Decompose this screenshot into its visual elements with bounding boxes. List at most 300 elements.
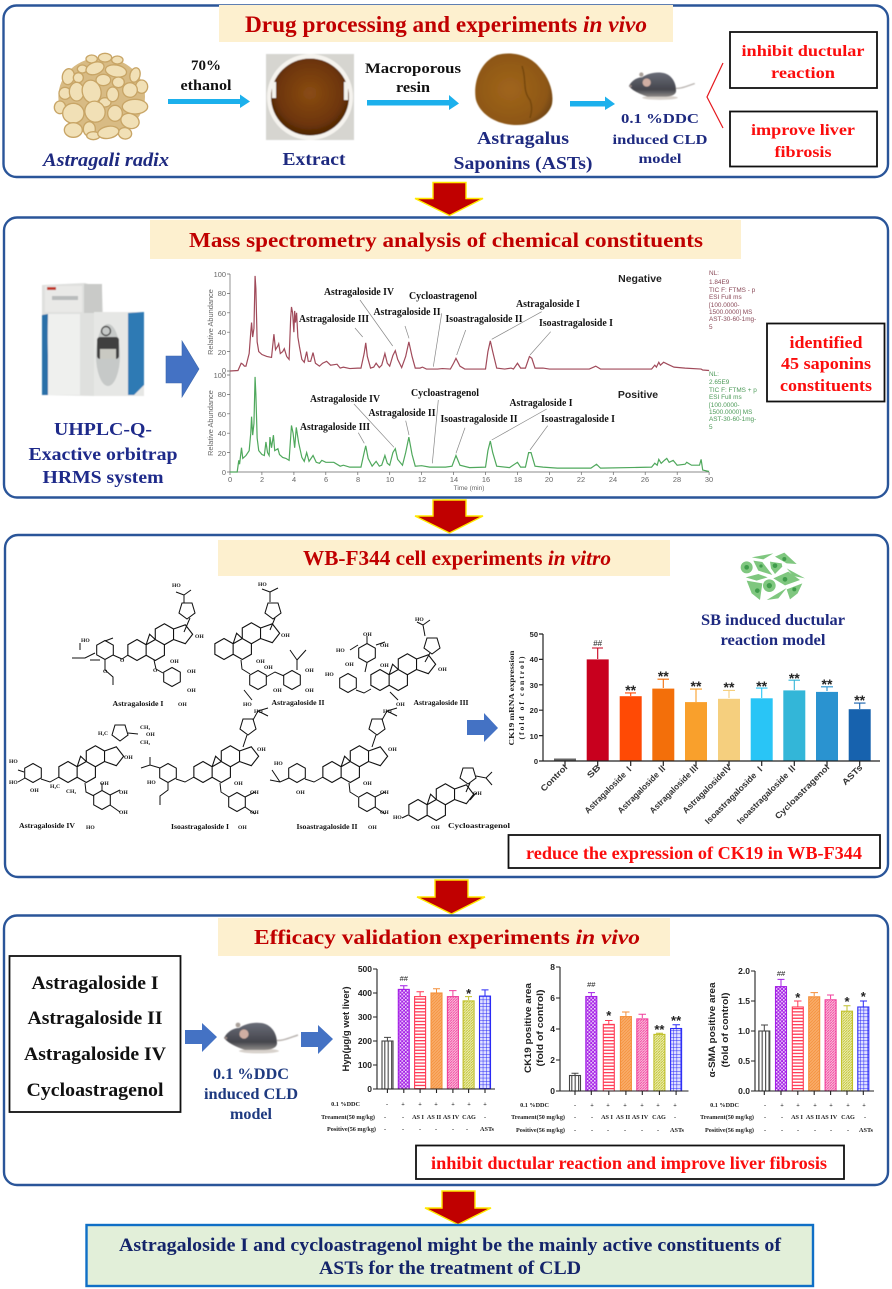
molecule: Astragaloside IV: OH — [124, 755, 133, 761]
peak labels: negative: Isoastragaloside I — [539, 318, 613, 329]
molecule: Isoastragaloside II: OH — [380, 810, 389, 816]
treatment table: + — [590, 1102, 594, 1109]
panel: drug processing — [4, 5, 888, 177]
significance marks: ** — [691, 678, 702, 694]
molecule: Astragaloside IV: HO — [9, 759, 18, 765]
peak labels: positive — [300, 388, 615, 433]
molecule: Astragaloside III: OH — [380, 663, 389, 669]
significance marks: ** — [724, 679, 735, 695]
label: instrument name: UHPLC-Q- — [54, 419, 152, 439]
significance marks — [593, 639, 866, 708]
molecule: Astragaloside I: OH — [170, 659, 179, 665]
bars — [382, 989, 490, 1089]
molecule: Astragaloside III: HO — [336, 648, 345, 654]
y ticks: 400 — [358, 988, 372, 998]
peak labels: positive: Astragaloside III — [300, 422, 370, 433]
error bars — [572, 993, 680, 1075]
chart: total ion chromatogram: 60 — [218, 309, 226, 318]
chart: total ion chromatogram: 100 — [214, 270, 226, 279]
molecule: Astragaloside I: Astragaloside I — [112, 700, 164, 708]
y ticks — [550, 962, 555, 1096]
significance marks: ## — [587, 980, 596, 989]
treatment table: + — [813, 1102, 817, 1109]
treatment table: - — [466, 1126, 468, 1133]
molecule: Astragaloside II: OH — [281, 633, 290, 639]
molecule: Astragaloside III: OH — [363, 632, 372, 638]
icon: mouse — [224, 1023, 298, 1053]
category labels: Cycloastragenol — [773, 762, 831, 821]
molecule: Cycloastragenol: OH — [431, 825, 440, 831]
box: selected compounds: Astragaloside IV — [24, 1044, 166, 1065]
treatment table — [511, 1102, 685, 1134]
category labels: Isoastragaloside Ⅰ — [703, 762, 766, 826]
molecule: Astragaloside II: OH — [256, 659, 265, 665]
treatment table: Positive(56 mg/kg) — [327, 1126, 376, 1133]
molecule: Astragaloside II: OH — [305, 688, 314, 694]
treatment table: CAG — [841, 1114, 855, 1121]
label: instrument name: Exactive orbitrap — [28, 444, 178, 464]
callout: inhibit ductular reaction — [730, 32, 877, 88]
peak labels: positive: Isoastragaloside II — [440, 414, 518, 425]
label: negative mode: Negative — [618, 273, 662, 285]
callout: identified 45 saponins: 45 saponins — [781, 354, 871, 373]
molecule: Astragaloside IV: CH₃ — [140, 725, 150, 731]
molecule: Astragaloside II — [215, 582, 325, 708]
treatment table — [700, 1102, 874, 1134]
error bars — [592, 648, 866, 709]
chart: CK19 mRNA — [507, 630, 880, 826]
treatment table: + — [483, 1101, 487, 1108]
scan info: positive: [100.0000- — [709, 402, 740, 409]
y ticks: 1.5 — [738, 996, 750, 1006]
molecule: Cycloastragenol: HO — [393, 815, 402, 821]
peak labels: negative: Astragaloside III — [299, 314, 369, 325]
molecule: Astragaloside III — [325, 617, 469, 708]
molecule: Cycloastragenol: OH — [473, 791, 482, 797]
treatment table: 0.1 %DDC — [331, 1101, 360, 1108]
molecule: Astragaloside IV: H₃C — [50, 784, 60, 790]
y ticks: 2 — [550, 1055, 555, 1065]
molecule: Astragaloside IV: OH — [119, 810, 128, 816]
category labels: Astragaloside Ⅲ — [647, 762, 700, 815]
significance marks: ## — [400, 974, 409, 983]
treatment table: - — [435, 1126, 437, 1133]
y ticks: 0.0 — [738, 1086, 750, 1096]
scan info: positive: NL: — [709, 371, 719, 378]
molecule: Astragaloside I: HO — [81, 638, 90, 644]
chart: total ion chromatogram: 18 — [514, 475, 522, 484]
chart: total ion chromatogram: 30 — [705, 475, 713, 484]
treatment table: Positive(56 mg/kg) — [705, 1127, 754, 1134]
scan info: negative: 1.84E9 — [709, 279, 730, 286]
label: DDC CLD model: model — [638, 152, 682, 167]
treatment table: + — [656, 1102, 660, 1109]
y ticks: 20 — [530, 706, 538, 715]
chart: total ion chromatogram: Relative Abundance — [206, 289, 215, 355]
scan info: negative: ESI Full ms — [709, 294, 742, 301]
treatment table: - — [386, 1101, 388, 1108]
callout: inhibit ductular reaction: reaction — [771, 65, 835, 82]
treatment table: - — [674, 1114, 676, 1121]
y axis title: CK19 mRNA expression — [507, 650, 516, 746]
molecule: Astragaloside IV: CH₃ — [66, 789, 76, 795]
label: astragali radix: Astragali radix — [42, 150, 170, 171]
significance marks: ** — [756, 678, 768, 694]
molecule: Isoastragaloside I: OH — [238, 825, 247, 831]
peak labels: negative: Astragaloside IV — [324, 287, 394, 298]
treatment table: AS I — [791, 1114, 804, 1121]
significance marks: ## — [593, 639, 603, 648]
molecule: Cycloastragenol — [393, 768, 510, 831]
bracket: two outcomes — [707, 63, 723, 128]
scan info: positive: 5 — [709, 424, 713, 431]
panel title: Drug processing and experiments in vivo — [245, 12, 647, 37]
category labels: Control — [538, 762, 569, 793]
treatment table: - — [864, 1114, 866, 1121]
treatment table: Positive(56 mg/kg) — [516, 1127, 565, 1134]
chart: total ion chromatogram: 0 — [222, 366, 226, 375]
significance marks: ** — [822, 676, 833, 692]
treatment table: - — [384, 1126, 386, 1133]
arrow: to mouse — [570, 96, 615, 110]
treatment table: - — [402, 1114, 404, 1121]
y ticks: 1.0 — [738, 1026, 750, 1036]
treatment table: AS IV — [632, 1114, 649, 1121]
molecule: Astragaloside I: O — [120, 658, 125, 664]
treatment table: + — [451, 1101, 455, 1108]
image: astragali radix slices — [54, 53, 148, 140]
y ticks: 100 — [358, 1060, 372, 1070]
label: extract: Extract — [282, 149, 346, 169]
molecule: Astragaloside III: OH — [438, 667, 447, 673]
scan info: negative: AST-30-60-1mg- — [709, 316, 756, 323]
chart: total ion chromatogram: 12 — [418, 475, 426, 484]
treatment table: AS IV — [821, 1114, 838, 1121]
treatment table: - — [574, 1114, 576, 1121]
scan info: negative: NL: — [709, 270, 719, 277]
treatment table: - — [764, 1127, 766, 1134]
callout: improve liver fibrosis — [730, 112, 877, 166]
label: DDC CLD model: induced CLD — [204, 1086, 298, 1103]
treatment table: - — [764, 1114, 766, 1121]
y ticks — [530, 630, 538, 766]
treatment table: AS II — [806, 1114, 821, 1121]
chart: total ion chromatogram: 20 — [218, 348, 226, 357]
chart: Hyp: Hyp(μg/g wet liver) — [341, 986, 351, 1072]
label: DDC CLD model: 0.1 %DDC — [213, 1066, 289, 1083]
molecule: Astragaloside II: Astragaloside II — [272, 699, 325, 707]
molecule: Astragaloside IV — [9, 725, 155, 831]
y ticks: 6 — [550, 993, 555, 1003]
conclusion box: Astragaloside I and cycloastragenol might be the mainly active constituents of — [119, 1235, 782, 1256]
scan info: positive: ESI Full ms — [709, 394, 742, 401]
panel title: Efficacy validation experiments in vivo — [254, 925, 640, 949]
callout: identified 45 saponins: constituents — [780, 376, 872, 395]
treatment table: + — [401, 1101, 405, 1108]
panel title background — [219, 5, 673, 42]
significance marks — [777, 969, 867, 1009]
molecule: Astragaloside I: OH — [187, 688, 196, 694]
treatment table: - — [781, 1114, 783, 1121]
image: extract dish — [266, 54, 354, 140]
significance marks: ** — [658, 668, 669, 684]
category labels — [538, 762, 865, 826]
chart: total ion chromatogram: 26 — [641, 475, 649, 484]
panel: cell experiments — [5, 535, 888, 877]
treatment table: + — [606, 1102, 610, 1109]
treatment table — [321, 1101, 495, 1133]
label: ethanol: ethanol — [180, 78, 232, 94]
chart: Hyp — [321, 964, 495, 1133]
label: astragalus saponins: Astragalus — [477, 128, 569, 148]
arrow: to charts — [301, 1025, 333, 1054]
label: DDC CLD model: 0.1 %DDC — [621, 112, 699, 127]
peak labels: negative — [299, 287, 613, 329]
chart: alpha-SMA positive area: α-SMA positive area — [707, 981, 717, 1078]
y ticks — [358, 964, 372, 1094]
molecule: Astragaloside I: O — [103, 669, 108, 675]
molecule: Isoastragaloside I: OH — [234, 781, 243, 787]
bars — [759, 987, 869, 1091]
trace: positive ion mode — [230, 377, 709, 472]
treatment table: - — [657, 1127, 659, 1134]
chart: total ion chromatogram: 14 — [450, 475, 458, 484]
chart: total ion chromatogram — [206, 270, 757, 492]
significance marks: * — [844, 994, 850, 1009]
category labels: ASTs — [840, 762, 865, 787]
molecule: Astragaloside IV: H₃C — [98, 731, 108, 737]
molecule: Astragaloside I: O — [153, 668, 158, 674]
chart: CK19 positive area: CK19 positive area — [523, 982, 533, 1073]
arrow: compounds to chart — [467, 713, 498, 742]
molecule: Astragaloside III: HO — [415, 617, 424, 623]
molecule: Isoastragaloside II: OH — [368, 825, 377, 831]
treatment table: CAG — [462, 1114, 476, 1121]
molecule: Astragaloside III: Astragaloside III — [414, 699, 469, 707]
molecule: Isoastragaloside II: OH — [363, 781, 372, 787]
molecule: Astragaloside IV: HO — [86, 825, 95, 831]
significance marks: * — [606, 1008, 612, 1023]
panel title background — [218, 540, 670, 576]
error bars — [761, 979, 867, 1031]
treatment table: AS II — [616, 1114, 631, 1121]
panel title background — [218, 918, 670, 956]
molecule: Isoastragaloside I: OH — [250, 810, 259, 816]
molecule: Astragaloside I — [72, 583, 204, 708]
treatment table: Treament(50 mg/kg) — [700, 1114, 754, 1121]
arrow: down 2 — [415, 500, 483, 533]
y ticks: 30 — [530, 681, 538, 690]
molecule: Isoastragaloside I: OH — [257, 747, 266, 753]
axes — [751, 971, 874, 1095]
peak labels: positive: Cycloastragenol — [411, 388, 479, 399]
treatment table: + — [418, 1101, 422, 1108]
treatment table: + — [640, 1102, 644, 1109]
y ticks: 0.5 — [738, 1056, 750, 1066]
chart: total ion chromatogram: 40 — [218, 328, 226, 337]
scan info: negative: 5 — [709, 324, 713, 331]
arrow: to extract — [168, 94, 250, 108]
chart: total ion chromatogram: 80 — [218, 289, 226, 298]
scan info: positive: 2.65E9 — [709, 379, 730, 386]
label: instrument name: HRMS system — [42, 467, 164, 487]
peak labels: positive: Astragaloside II — [368, 408, 436, 419]
callout: inhibit ductular reaction: inhibit ductular — [742, 43, 864, 60]
y ticks: 8 — [550, 962, 555, 972]
peak labels: negative: Astragaloside II — [374, 307, 440, 318]
y ticks: 40 — [530, 655, 538, 664]
treatment table: + — [467, 1101, 471, 1108]
y ticks: 0 — [534, 757, 538, 766]
treatment table: ASTs — [859, 1127, 874, 1134]
label: macroporous resin: Macroporous — [365, 61, 461, 77]
treatment table: 0.1 %DDC — [710, 1102, 739, 1109]
significance marks: * — [861, 989, 867, 1004]
molecule: Astragaloside II: HO — [243, 702, 252, 708]
molecule: Astragaloside IV: Astragaloside IV — [19, 822, 75, 830]
molecule: Astragaloside IV: CH₃ — [140, 740, 150, 746]
box: selected compounds: Astragaloside I — [32, 973, 158, 994]
chart: total ion chromatogram: Relative Abundance — [206, 390, 215, 456]
y ticks: 10 — [530, 732, 538, 741]
treatment table: + — [862, 1102, 866, 1109]
chart: total ion chromatogram: 0 — [222, 468, 226, 477]
molecule: Astragaloside II: OH — [273, 688, 282, 694]
treatment table: - — [574, 1127, 576, 1134]
arrow: down 1 — [415, 182, 483, 216]
label: ethanol: 70% — [191, 58, 221, 74]
molecule: Isoastragaloside I: HO — [254, 709, 263, 715]
significance marks: ** — [625, 682, 637, 698]
bars — [554, 659, 871, 761]
treatment table: AS I — [601, 1114, 614, 1121]
significance marks — [400, 974, 472, 1001]
category labels: AstragalosideⅣ — [680, 762, 734, 815]
treatment table: - — [591, 1127, 593, 1134]
y ticks: 4 — [550, 1024, 555, 1034]
chart: total ion chromatogram: 8 — [356, 475, 360, 484]
scan info: negative: TIC F: FTMS - p — [709, 287, 756, 294]
y ticks: 0 — [367, 1084, 372, 1094]
treatment table: + — [829, 1102, 833, 1109]
significance marks: * — [795, 990, 801, 1005]
molecule: Astragaloside III: OH — [380, 643, 389, 649]
treatment table: + — [623, 1102, 627, 1109]
image: saponin powder — [475, 54, 552, 125]
trace: negative ion mode — [230, 276, 709, 371]
treatment table: - — [830, 1127, 832, 1134]
y ticks: 50 — [530, 630, 538, 639]
significance marks: ** — [671, 1013, 682, 1028]
chart: total ion chromatogram: 100 — [214, 371, 226, 380]
molecule: Isoastragaloside II: HO — [274, 761, 283, 767]
callout: reduce CK19 — [508, 835, 880, 868]
treatment table: AS I — [412, 1114, 425, 1121]
label: DDC CLD model: induced CLD — [612, 133, 708, 148]
chart: total ion chromatogram: 60 — [218, 410, 226, 419]
y ticks: 200 — [358, 1036, 372, 1046]
significance marks: ** — [654, 1022, 665, 1037]
icon: mouse — [629, 72, 695, 100]
molecule: Isoastragaloside I: Isoastragaloside I — [171, 823, 229, 831]
molecule: Astragaloside III: OH — [345, 662, 354, 668]
significance marks: ** — [789, 670, 800, 686]
arrow: to mouse — [185, 1023, 217, 1052]
treatment table: Treament(50 mg/kg) — [321, 1114, 375, 1121]
panel: mass spectrometry — [4, 218, 888, 498]
label: astragalus saponins: Saponins (ASTs) — [454, 153, 593, 174]
callout: identified 45 saponins — [767, 324, 884, 402]
treatment table: Treament(50 mg/kg) — [511, 1114, 565, 1121]
treatment table: AS II — [427, 1114, 442, 1121]
molecule: Isoastragaloside I — [141, 708, 268, 831]
treatment table: ASTs — [670, 1127, 685, 1134]
molecule: Astragaloside I: HO — [172, 583, 181, 589]
molecule: Astragaloside II: OH — [264, 665, 273, 671]
label: positive mode: Positive — [618, 389, 658, 401]
box: selected compounds: Cycloastragenol — [26, 1080, 164, 1101]
molecule: Astragaloside IV: HO — [9, 780, 18, 786]
arrow: down 3 — [417, 880, 485, 914]
callout: inhibit and improve: inhibit ductular reaction and improve liver fibrosis — [431, 1153, 827, 1173]
panel title: WB-F344 cell experiments in vitro — [303, 546, 611, 570]
treatment table: - — [847, 1127, 849, 1134]
peak labels: negative: Cycloastragenol — [409, 291, 477, 302]
treatment table: - — [402, 1126, 404, 1133]
significance marks: * — [466, 986, 472, 1001]
molecule: Isoastragaloside II: OH — [296, 790, 305, 796]
treatment table: ASTs — [480, 1126, 495, 1133]
chart: total ion chromatogram: 24 — [609, 475, 617, 484]
significance marks — [587, 980, 682, 1037]
leader lines — [354, 300, 551, 463]
treatment table: - — [624, 1127, 626, 1134]
conclusion box — [86, 1225, 813, 1286]
chart: total ion chromatogram: Time (min) — [454, 485, 484, 492]
chart: CK19 positive area — [511, 962, 688, 1134]
peak labels: negative: Isoastragaloside II — [446, 314, 522, 325]
peak labels: negative: Astragaloside I — [516, 299, 580, 310]
box: selected compounds: Astragaloside II — [28, 1008, 162, 1029]
molecule: Astragaloside II: OH — [305, 668, 314, 674]
bars — [570, 996, 682, 1091]
treatment table: + — [796, 1102, 800, 1109]
treatment table: - — [484, 1114, 486, 1121]
callout: improve liver fibrosis: improve liver — [751, 122, 855, 139]
axes — [556, 967, 688, 1095]
category labels: Isoastragaloside Ⅱ — [735, 762, 798, 826]
scan info: positive: 1500.0000] MS — [709, 409, 752, 416]
treatment table: - — [384, 1114, 386, 1121]
molecule: Isoastragaloside I: OH — [250, 790, 259, 796]
callout: improve liver fibrosis: fibrosis — [774, 144, 832, 161]
arrow: instrument to chromatogram — [166, 341, 199, 397]
panel title: Mass spectrometry analysis of chemical constituents — [189, 228, 703, 252]
molecule: Isoastragaloside II: OH — [388, 747, 397, 753]
y ticks: 2.0 — [738, 966, 750, 976]
molecule: Isoastragaloside II: Isoastragaloside II — [296, 823, 358, 831]
chart: total ion chromatogram: 20 — [545, 475, 553, 484]
y ticks: 500 — [358, 964, 372, 974]
molecule: Astragaloside IV: OH — [119, 790, 128, 796]
chart: CK19 positive area: (fold of control) — [535, 990, 545, 1066]
molecule: Astragaloside I: OH — [187, 669, 196, 675]
treatment table: AS IV — [443, 1114, 460, 1121]
treatment table: - — [781, 1127, 783, 1134]
peak labels: positive: Astragaloside I — [510, 398, 572, 409]
panel: in vivo validation — [4, 916, 888, 1185]
scan info: negative: [100.0000- — [709, 302, 740, 309]
